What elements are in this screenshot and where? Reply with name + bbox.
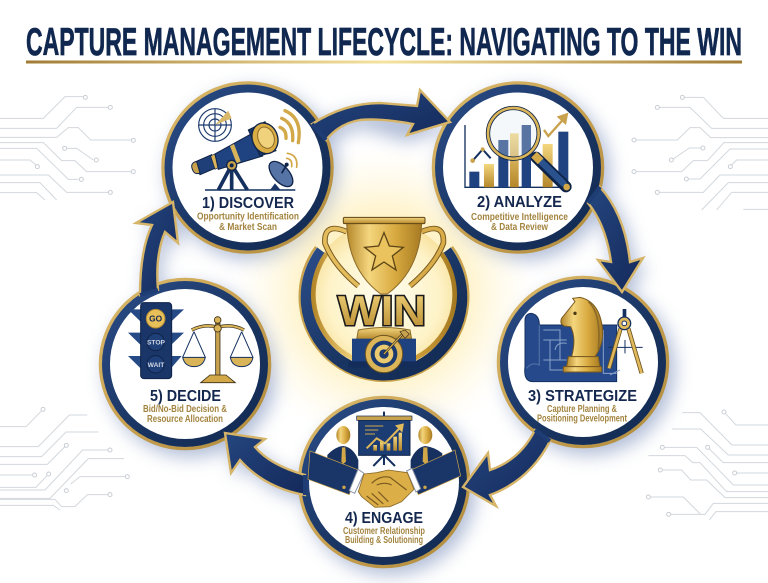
label: strategize: Positioning Development: [537, 414, 628, 424]
icon: traffic light and scales: WAIT: [148, 362, 164, 369]
background circuit: bottom right: [646, 410, 768, 520]
label: decide: Bid/No-Bid Decision &: [143, 404, 227, 415]
arrow: discover to analyze: [312, 90, 450, 140]
icon: handshake and presentation board: [308, 412, 461, 507]
icon: bar chart and magnifier: [465, 108, 570, 190]
title underline: [26, 60, 742, 64]
arrow: analyze to strategize: [588, 187, 643, 292]
label: decide: Resource Allocation: [147, 414, 223, 425]
ring: [434, 83, 602, 252]
icon: traffic light and scales: GO: [149, 314, 163, 324]
arrow: engage to decide: [225, 433, 305, 495]
background circuit: bottom left: [0, 407, 129, 510]
label: strategize: Capture Planning &: [547, 404, 617, 415]
label: engage: Building & Solutioning: [345, 535, 423, 546]
panel: 4 engage: [300, 398, 468, 566]
ring: [498, 278, 668, 446]
arrow: decide to discover: [136, 202, 178, 295]
label: engage: Customer Relationship: [343, 526, 425, 537]
label: analyze: 2) ANALYZE: [477, 194, 562, 211]
icon: traffic light and scales: [128, 303, 253, 383]
background circuit: top left: [0, 95, 135, 200]
icon: telescope, radar and dish: [192, 109, 299, 191]
label: discover: & Market Scan: [219, 222, 277, 233]
panel: 1 discover: [163, 83, 332, 252]
label: discover: [197, 195, 299, 233]
ring: [300, 398, 468, 566]
label: engage: 4) ENGAGE: [345, 510, 423, 527]
icon: win ring and trophy: WIN: [338, 287, 426, 334]
icon: chess knight, blueprint and compass: [525, 297, 643, 382]
icon: win ring and trophy: [300, 217, 468, 381]
label: strategize: 3) STRATEGIZE: [528, 388, 637, 405]
arrow: strategize to engage: [463, 430, 550, 506]
panel: win: [300, 217, 468, 381]
label: decide: 5) DECIDE: [150, 388, 221, 405]
label: discover: 1) DISCOVER: [202, 195, 294, 212]
label: decide: [143, 388, 227, 425]
ring: [163, 83, 332, 252]
label: analyze: Competitive Intelligence: [471, 212, 568, 223]
label: engage: [343, 510, 425, 546]
central golden glow: [234, 145, 534, 445]
panel: 5 decide: [100, 280, 270, 448]
soft shadows behind the cycle: [105, 88, 675, 575]
icon: traffic light and scales: STOP: [147, 340, 166, 347]
panel: 2 analyze: [434, 83, 602, 252]
ring: [100, 280, 270, 448]
label: analyze: [471, 194, 568, 233]
label: discover: Opportunity Identification: [197, 212, 299, 222]
label: strategize: [528, 388, 637, 424]
panel: 3 strategize: [498, 278, 668, 446]
background circuit: top right: [632, 95, 768, 210]
label: analyze: & Data Review: [491, 222, 548, 233]
